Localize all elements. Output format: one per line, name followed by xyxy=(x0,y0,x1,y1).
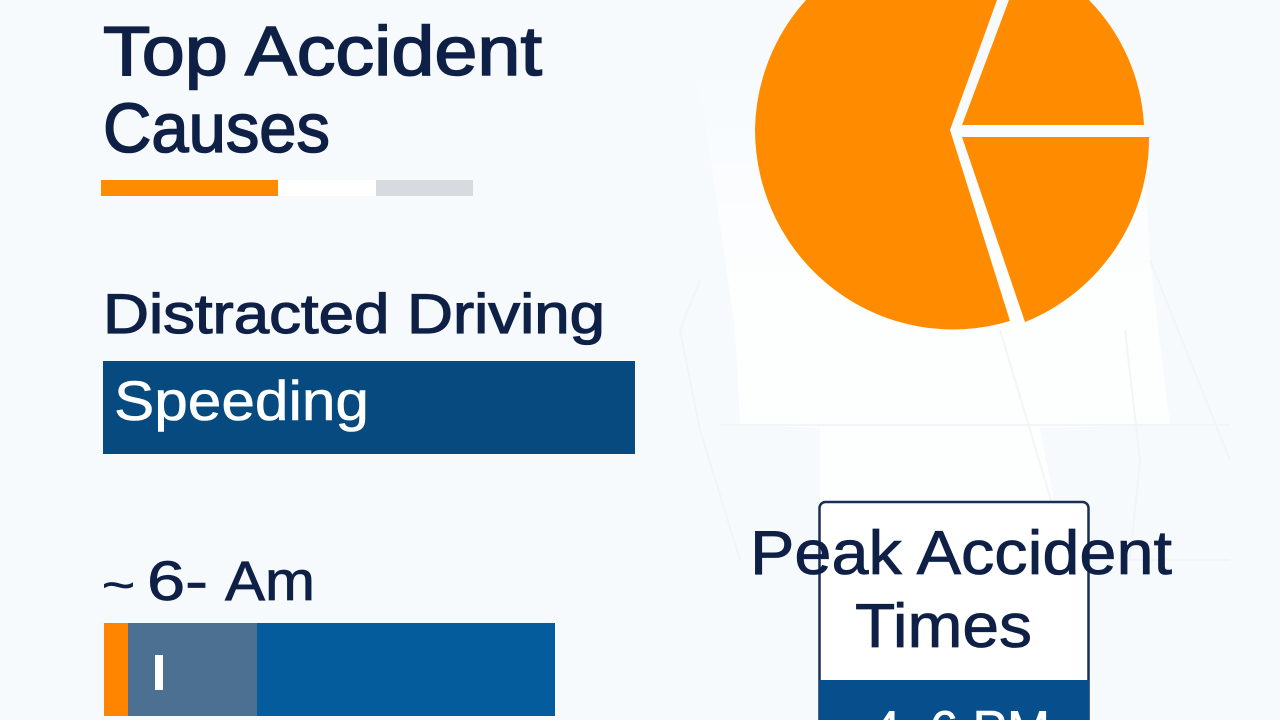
pie slice: upper right xyxy=(962,0,1144,125)
heading: Top Accident Causes xyxy=(103,12,542,167)
label: ~6- Am: Am xyxy=(225,549,315,612)
bar: Speeding xyxy=(103,361,635,454)
heading: Peak Accident Times: Times xyxy=(855,592,1032,661)
label: ~6- Am: ~ xyxy=(102,561,135,610)
pie slice: largest share xyxy=(755,0,1010,329)
label: ~6- Am: 6- xyxy=(147,549,208,612)
faint background road map xyxy=(680,50,1230,720)
heading: Peak Accident Times xyxy=(750,519,1172,661)
bar: Speeding: Speeding xyxy=(114,369,369,432)
pie chart: accident causes xyxy=(755,0,1149,329)
heading: Top Accident Causes: Top Accident xyxy=(103,12,542,90)
heading: Peak Accident Times: Peak Accident xyxy=(750,519,1172,588)
label: ~6- Am xyxy=(102,549,315,612)
pie slice: lower right xyxy=(962,137,1149,322)
callout card: peak times xyxy=(819,502,1089,720)
label: Distracted Driving: Distracted Driving xyxy=(103,282,605,345)
stacked time bar xyxy=(104,623,555,716)
heading: Top Accident Causes: Causes xyxy=(103,89,330,167)
heading underline: tri-colour bar xyxy=(101,180,473,196)
